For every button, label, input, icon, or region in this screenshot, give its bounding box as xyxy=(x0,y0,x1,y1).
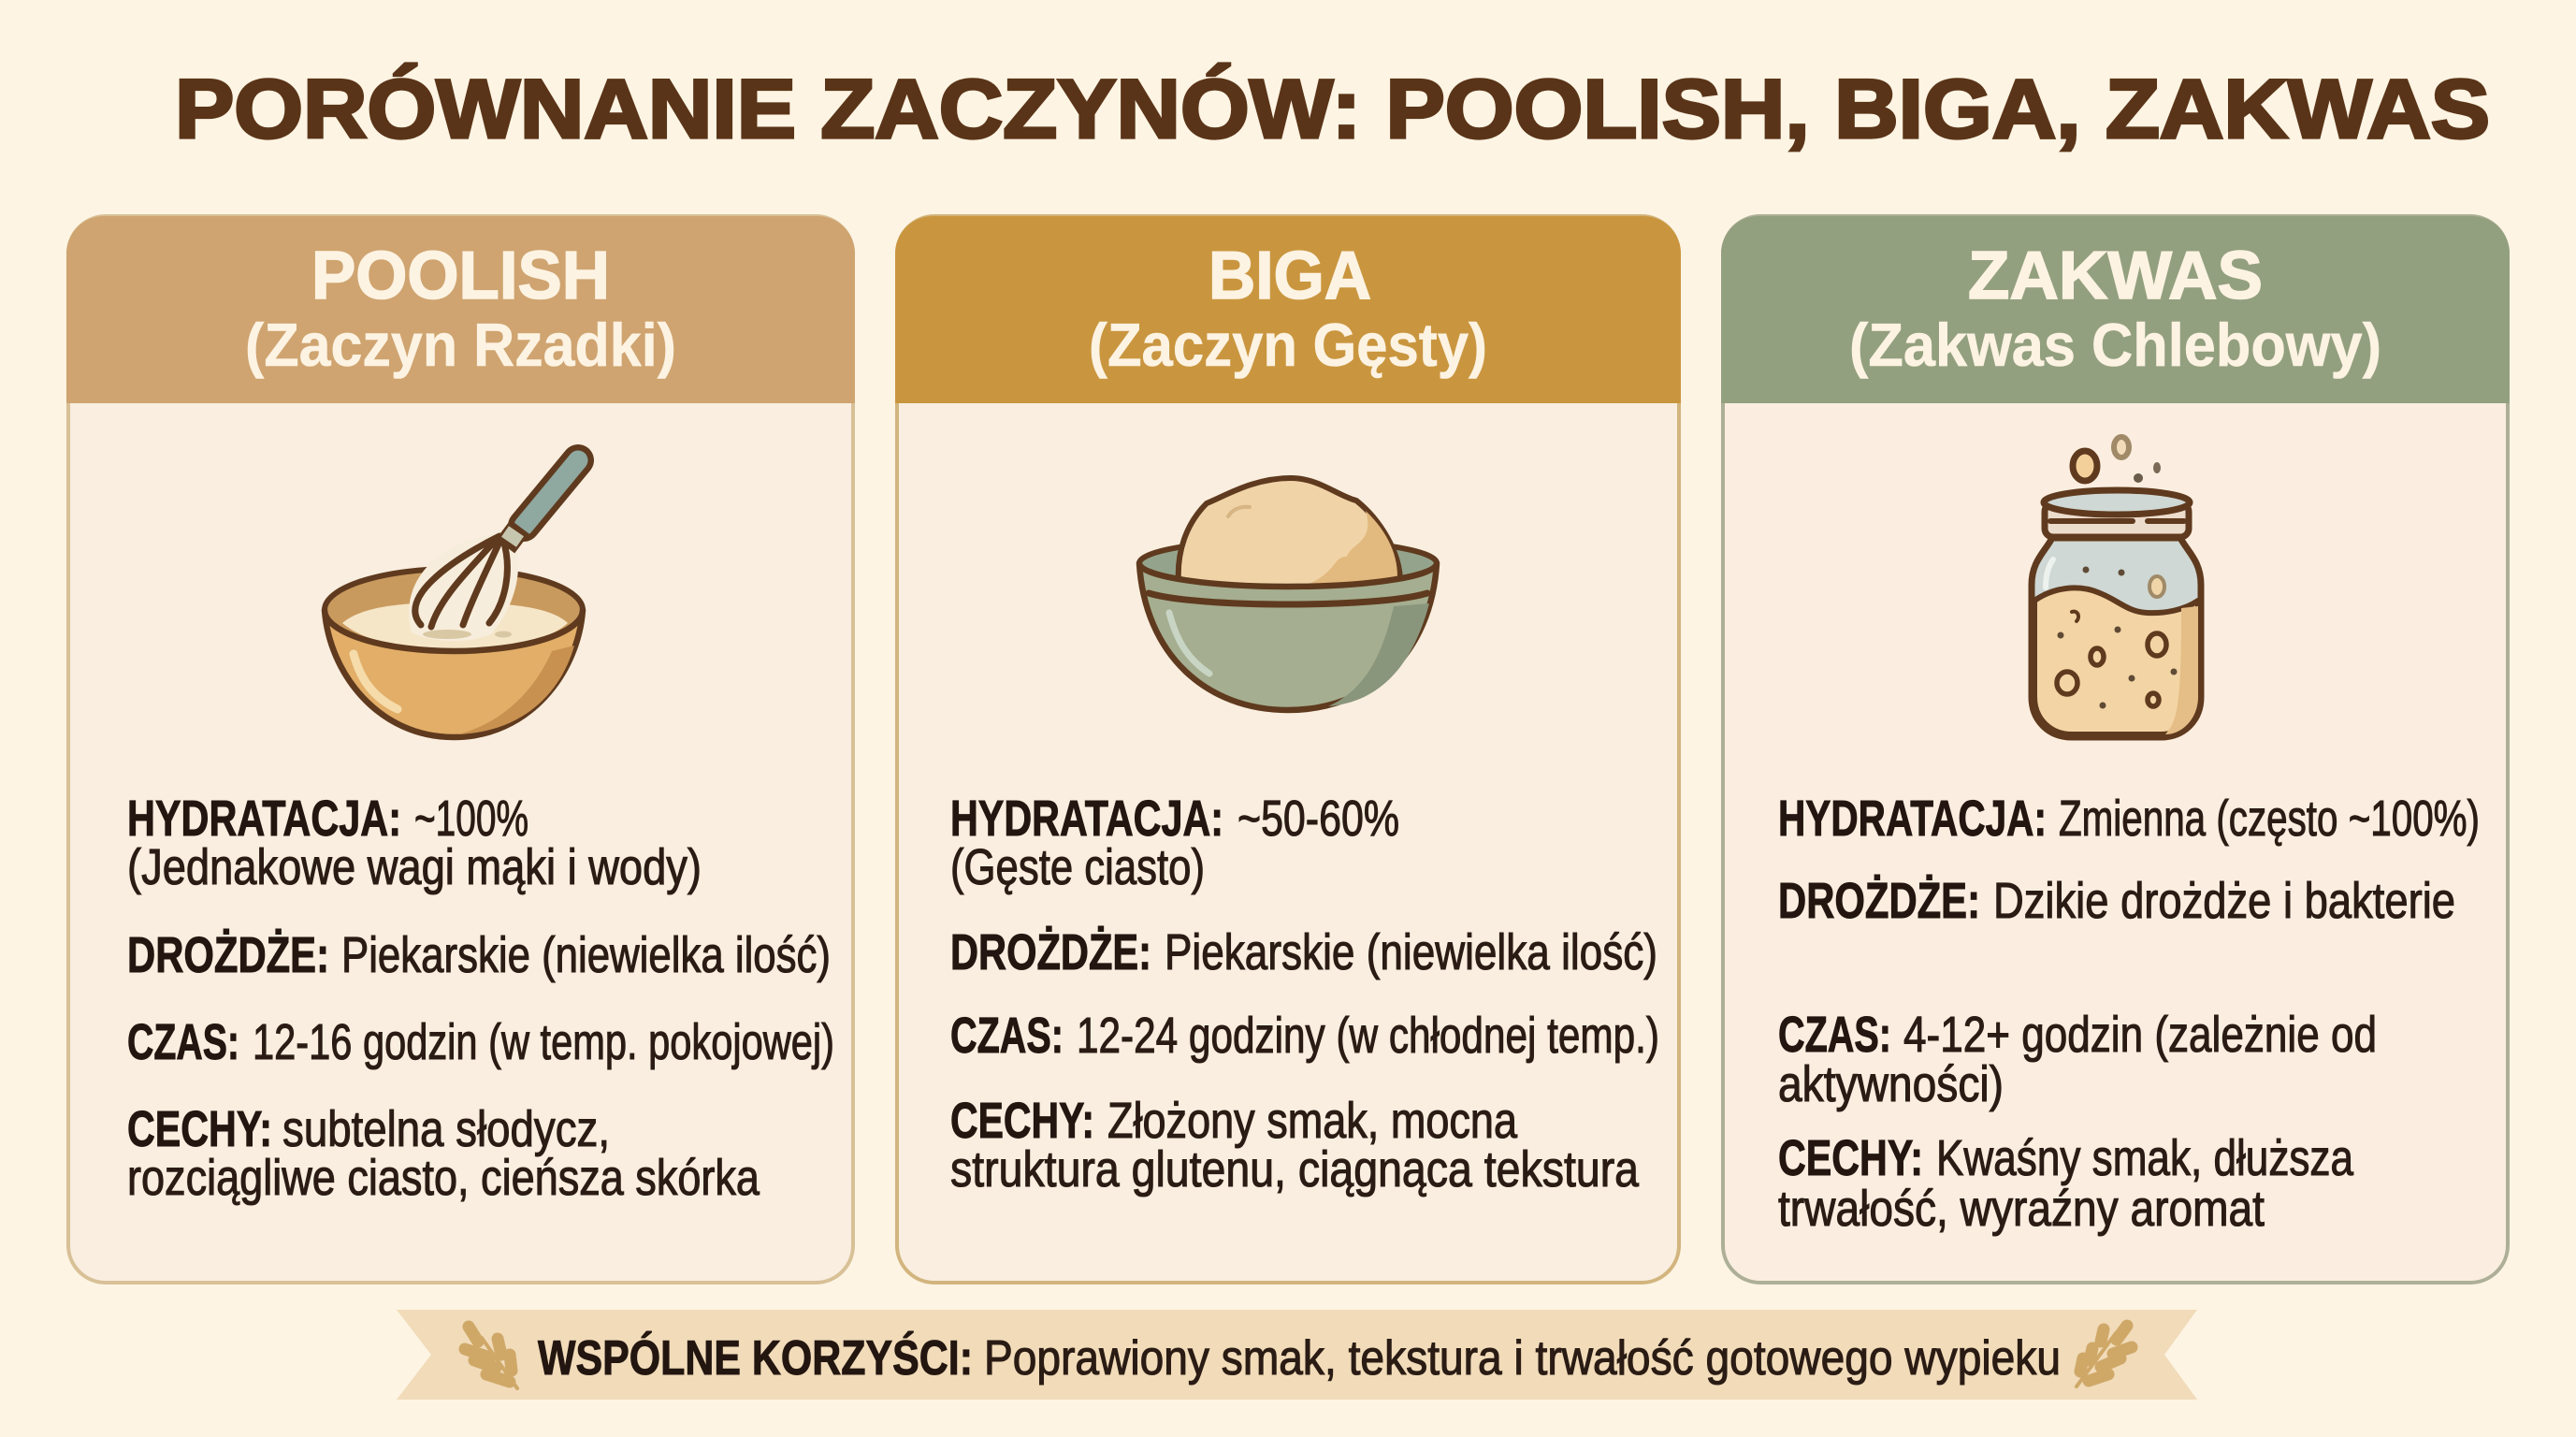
text: biga hydratacja: HYDRATACJA: xyxy=(950,791,1223,847)
text: biga czas: 12-24 godziny (w chłodnej temp.) xyxy=(1077,1008,1659,1064)
panel: biga xyxy=(895,216,1681,1283)
text: poolish hydratacja: (Jednakowe wagi mąki i wody) xyxy=(127,839,702,895)
header: poolish: (Zaczyn Rzadki) xyxy=(245,311,676,379)
text: biga drożdże xyxy=(950,924,1657,980)
text: zakwas hydratacja: HYDRATACJA: xyxy=(1778,791,2047,847)
text: banner label: WSPÓLNE KORZYŚCI: xyxy=(538,1331,973,1386)
banner: shared benefits xyxy=(397,1310,2197,1400)
text: poolish cechy: CECHY: xyxy=(127,1101,272,1157)
text: poolish cechy xyxy=(127,1101,760,1206)
text: biga hydratacja: (Gęste ciasto) xyxy=(950,839,1205,895)
text: poolish czas xyxy=(127,1014,834,1070)
text: zakwas drożdże: DROŻDŻE: xyxy=(1778,873,1980,929)
text: biga cechy: CECHY: xyxy=(950,1093,1094,1149)
text: zakwas drożdże xyxy=(1778,873,2455,929)
icon: wheat right xyxy=(2077,1326,2132,1386)
header: biga xyxy=(895,216,1681,403)
text: zakwas cechy: Kwaśny smak, dłuższa xyxy=(1936,1130,2354,1186)
text: biga drożdże: Piekarskie (niewielka ilość) xyxy=(1165,924,1657,980)
text: poolish drożdże: DROŻDŻE: xyxy=(127,927,329,983)
text: poolish czas: 12-16 godzin (w temp. pokojowej) xyxy=(253,1014,834,1070)
text: biga czas: CZAS: xyxy=(950,1008,1064,1064)
icon: sourdough jar xyxy=(2032,437,2201,737)
header: biga: BIGA xyxy=(1208,239,1371,313)
panel: zakwas xyxy=(1721,216,2510,1283)
text: poolish cechy: rozciągliwe ciasto, cieńsza skórka xyxy=(127,1150,760,1206)
text: poolish cechy: subtelna słodycz, xyxy=(282,1101,610,1157)
text: poolish drożdże: Piekarskie (niewielka ilość) xyxy=(341,927,831,983)
text: poolish hydratacja: HYDRATACJA: xyxy=(127,791,401,847)
panel: poolish xyxy=(66,216,855,1283)
text: biga czas xyxy=(950,1008,1659,1064)
header: poolish xyxy=(66,216,855,403)
text: zakwas czas: CZAS: xyxy=(1778,1007,1891,1063)
header: poolish: POOLISH xyxy=(311,239,610,313)
text: biga hydratacja: ~50-60% xyxy=(1237,791,1399,847)
text: zakwas hydratacja xyxy=(1778,791,2480,847)
text: biga cechy: Złożony smak, mocna xyxy=(1107,1093,1518,1149)
text: zakwas czas xyxy=(1778,1007,2377,1112)
text: biga drożdże: DROŻDŻE: xyxy=(950,924,1151,980)
text: poolish hydratacja xyxy=(127,791,702,895)
text: zakwas czas: 4-12+ godzin (zależnie od xyxy=(1903,1007,2377,1063)
text: poolish hydratacja: ~100% xyxy=(414,791,528,847)
text: zakwas czas: aktywności) xyxy=(1778,1056,2004,1112)
text: banner message: Poprawiony smak, tekstura i trwałość gotowego wypieku xyxy=(984,1331,2061,1386)
text: zakwas drożdże: Dzikie drożdże i bakterie xyxy=(1993,873,2455,929)
icon: wheat left xyxy=(465,1327,517,1388)
header: zakwas: ZAKWAS xyxy=(1968,239,2263,313)
text: biga cechy xyxy=(950,1093,1640,1198)
text: biga hydratacja xyxy=(950,791,1399,895)
text: biga cechy: struktura glutenu, ciągnąca tekstura xyxy=(950,1141,1640,1198)
text: zakwas cechy xyxy=(1778,1130,2354,1237)
icon: bowl with whisk xyxy=(325,460,583,737)
header: zakwas: (Zakwas Chlebowy) xyxy=(1849,311,2381,379)
title: PORÓWNANIE ZACZYNÓW: POOLISH, BIGA, ZAKWAS xyxy=(175,62,2490,155)
header: zakwas xyxy=(1721,216,2510,403)
text: zakwas cechy: trwałość, wyraźny aromat xyxy=(1778,1181,2265,1237)
text: poolish drożdże xyxy=(127,927,831,983)
icon: bowl with dough xyxy=(1139,478,1437,710)
text: poolish czas: CZAS: xyxy=(127,1014,239,1070)
text: zakwas cechy: CECHY: xyxy=(1778,1130,1923,1186)
header: biga: (Zaczyn Gęsty) xyxy=(1089,311,1487,379)
